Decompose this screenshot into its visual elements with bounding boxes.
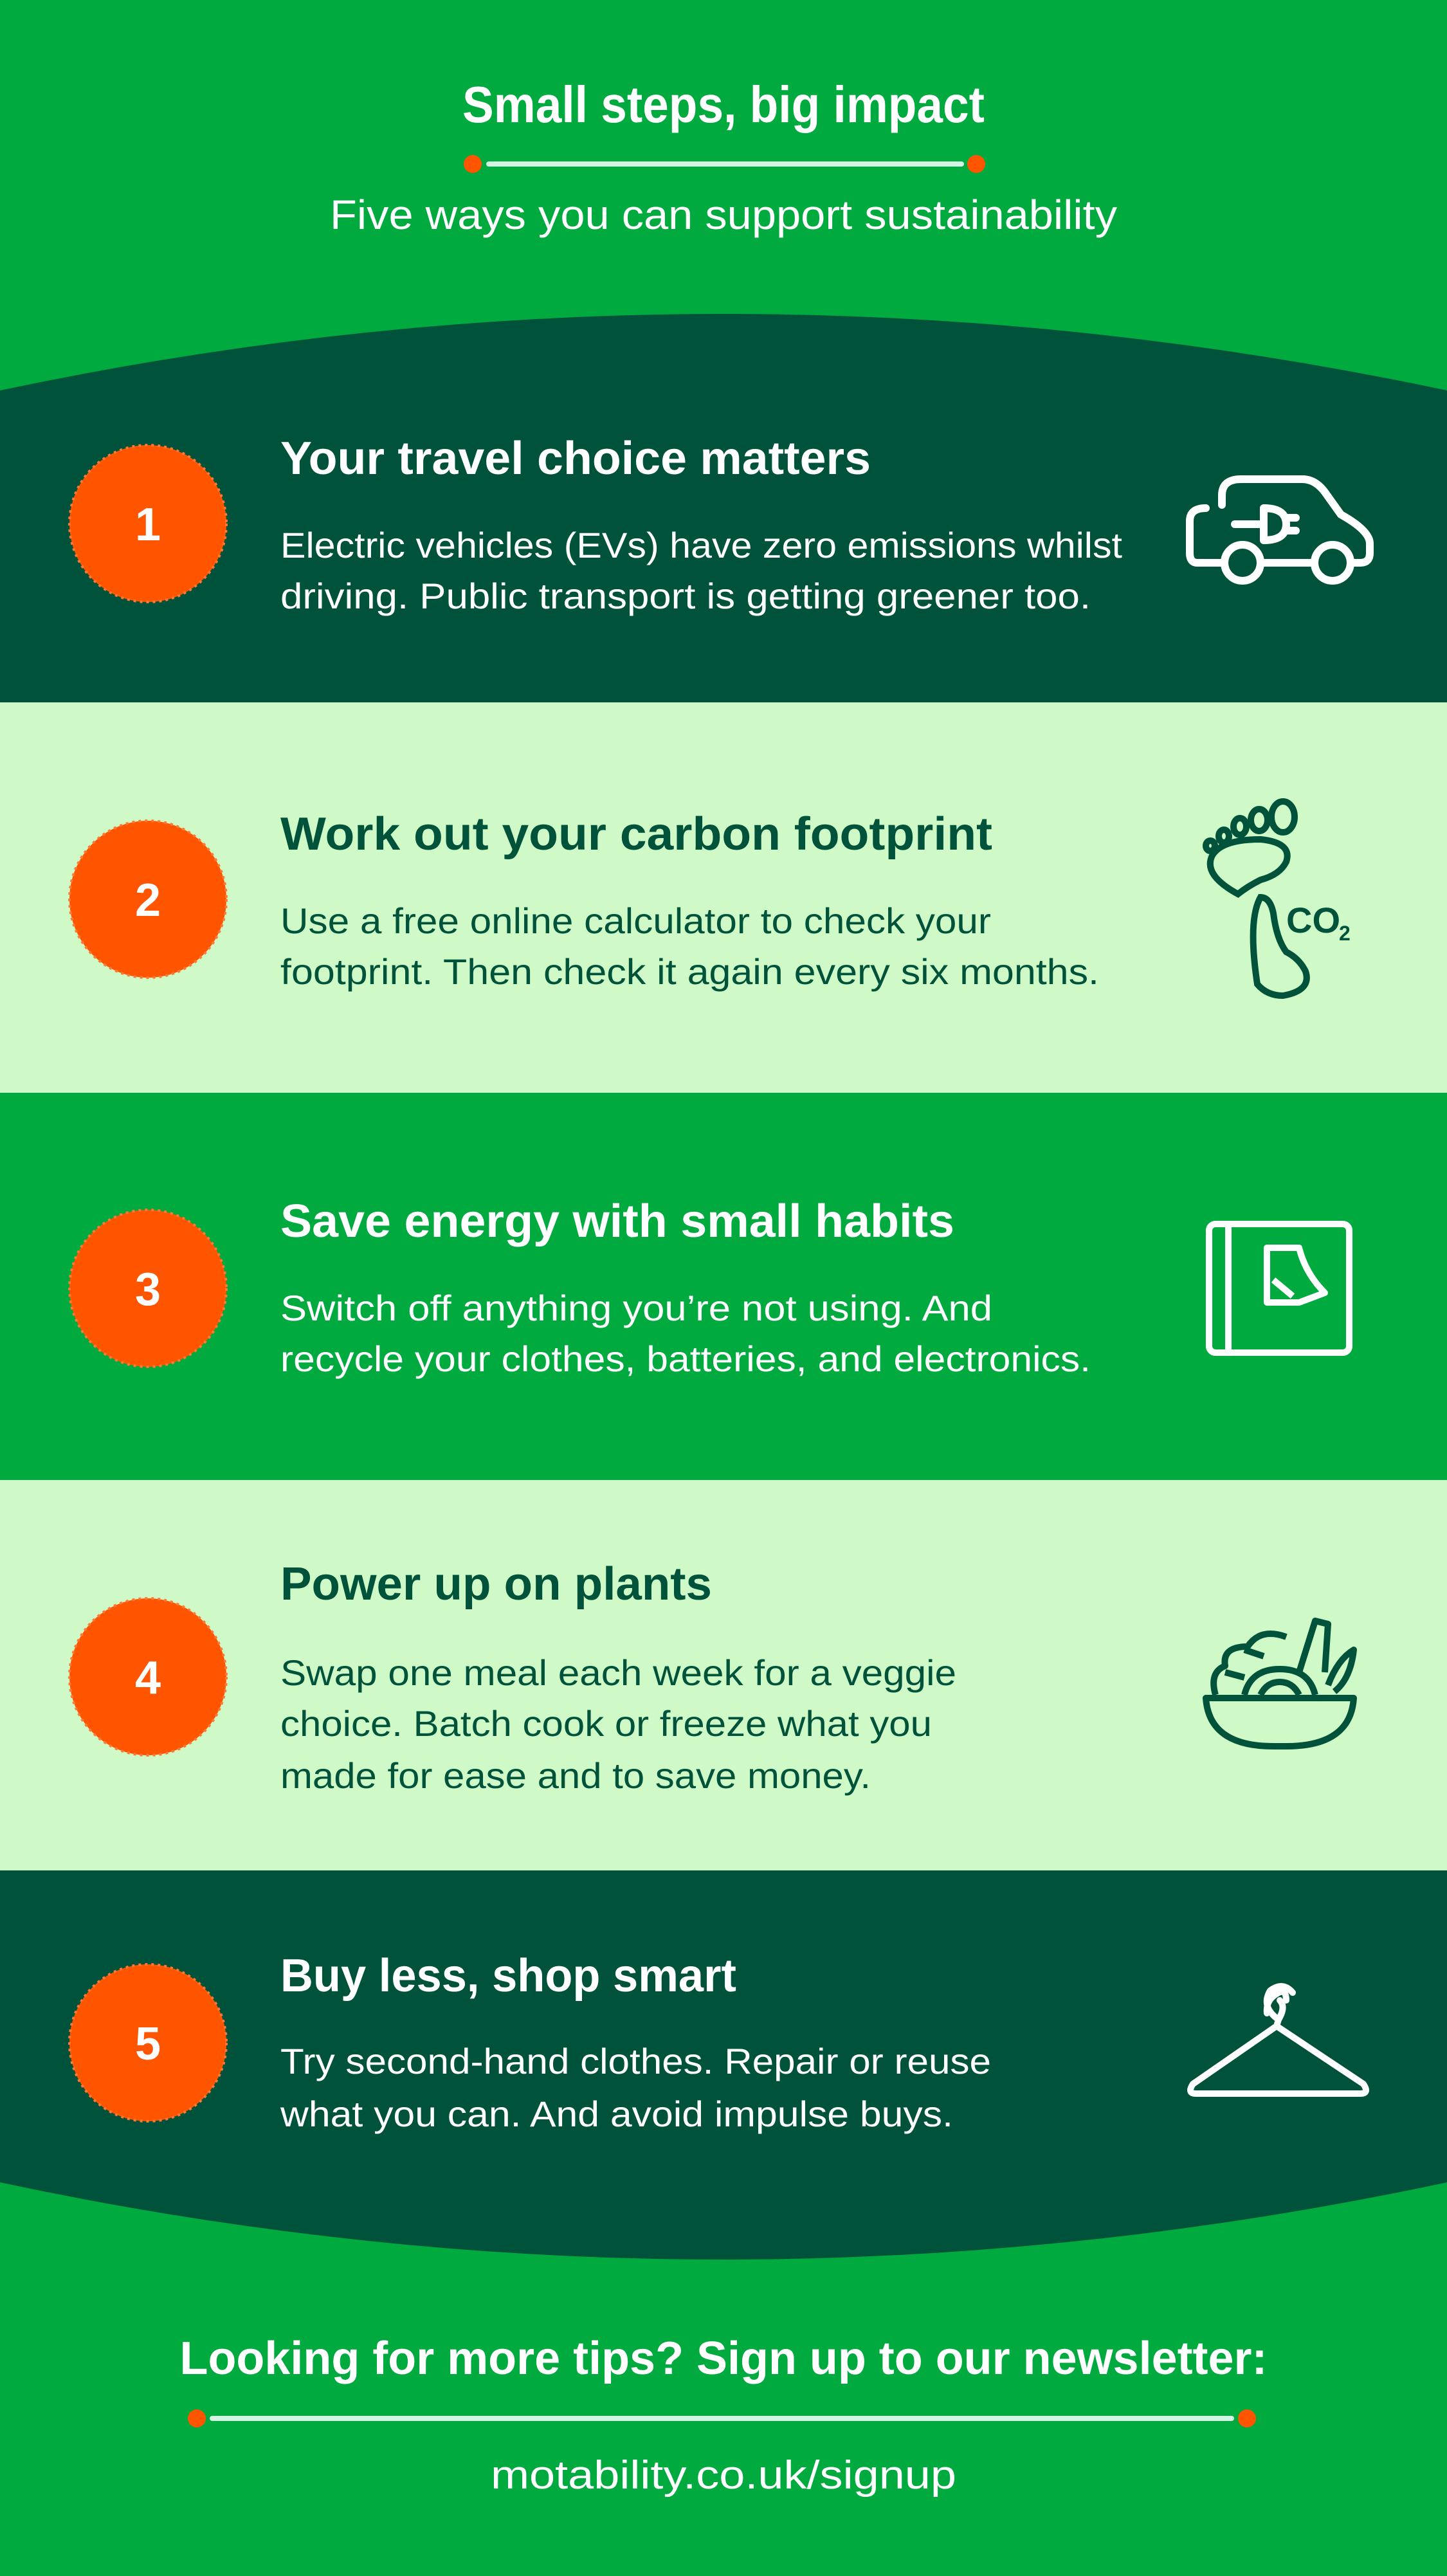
number badge 1 — [69, 445, 226, 602]
panel 2: carbon footprint: CO — [1286, 900, 1340, 940]
body 5: Try second-hand clothes. Repair or reuse — [280, 2041, 991, 2081]
icon: clothes hanger — [1190, 1986, 1366, 2094]
header: subtitle: Five ways you can support sustainability — [330, 192, 1117, 238]
number badge 1: 1 — [135, 499, 161, 551]
body 2: Use a free online calculator to check your — [280, 900, 991, 941]
body 3: recycle your clothes, batteries, and electronics. — [280, 1338, 1091, 1379]
number badge 3: 3 — [135, 1264, 161, 1315]
panel 3: energy — [69, 1196, 1349, 1379]
panel 2 background — [0, 702, 1447, 1093]
number badge 5: 5 — [135, 2018, 161, 2070]
icon: electric car — [1190, 479, 1370, 581]
body 1: Electric vehicles (EVs) have zero emissions whilst — [280, 525, 1122, 565]
footer: url: motability.co.uk/signup — [491, 2453, 956, 2498]
icon: salad bowl — [1206, 1621, 1354, 1746]
panel 4: plants — [69, 1558, 1354, 1796]
panel 1: travel — [69, 433, 1370, 616]
number badge 4 — [69, 1598, 226, 1755]
heading 3: Save energy with small habits — [280, 1196, 954, 1247]
number badge 4: 4 — [135, 1652, 161, 1704]
body 4: Swap one meal each week for a veggie — [280, 1652, 956, 1693]
number badge 2 — [69, 821, 226, 978]
icon: light switch — [1209, 1224, 1349, 1353]
panel 5: shopping — [69, 1950, 1366, 2134]
heading 5: Buy less, shop smart — [280, 1950, 736, 2002]
panel 4 background — [0, 1480, 1447, 1870]
body 4: made for ease and to save money. — [280, 1755, 871, 1796]
body 4: choice. Batch cook or freeze what you — [280, 1703, 932, 1744]
heading 2: Work out your carbon footprint — [280, 808, 992, 860]
panel 5 background — [0, 1870, 1447, 2260]
icon: footprint CO2 — [1206, 801, 1307, 996]
number badge 5 — [69, 1964, 226, 2121]
body 3: Switch off anything you’re not using. And — [280, 1288, 992, 1328]
header: title: Small steps, big impact — [462, 76, 985, 133]
number badge 3 — [69, 1210, 226, 1367]
heading 1: Your travel choice matters — [280, 433, 871, 484]
body 5: what you can. And avoid impulse buys. — [280, 2094, 953, 2134]
panel 2: carbon footprint — [69, 801, 1351, 996]
footer: call to action: Looking for more tips? Sign up to our newsletter: — [180, 2333, 1267, 2384]
panel 1 background — [0, 314, 1447, 702]
footer divider — [188, 2409, 1256, 2427]
number badge 2: 2 — [135, 875, 161, 926]
body 2: footprint. Then check it again every six months. — [280, 951, 1099, 992]
body 1: driving. Public transport is getting greener too. — [280, 576, 1091, 616]
heading 4: Power up on plants — [280, 1558, 712, 1610]
header divider — [464, 155, 985, 173]
panel 2: carbon footprint: 2 — [1339, 922, 1351, 945]
panel 3 background — [0, 1093, 1447, 1480]
